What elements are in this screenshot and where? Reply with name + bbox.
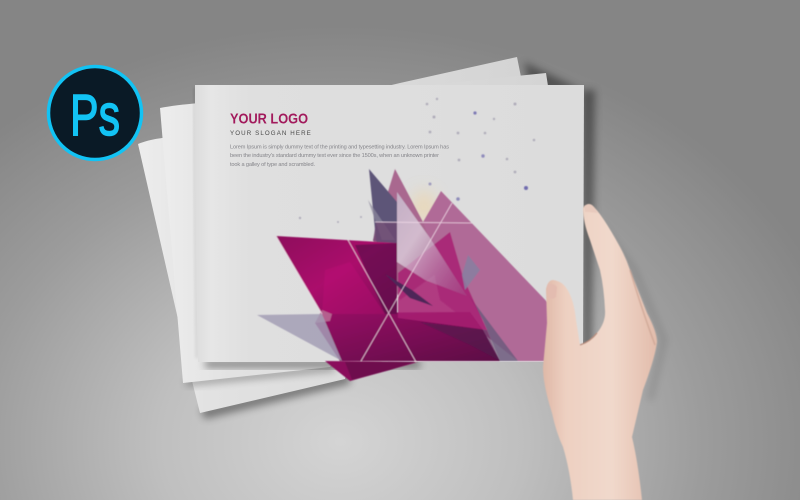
grey-purple band [467, 293, 518, 361]
main page [195, 85, 584, 362]
knuckle shade [630, 270, 655, 345]
index nail [584, 204, 598, 213]
lower magenta plane [315, 312, 500, 361]
big magenta quad [276, 236, 397, 314]
pink centre plane [398, 232, 487, 330]
shadow on back sheet [186, 364, 335, 386]
abstract crystal artwork [257, 169, 552, 381]
body text: took a galley of type and scrambled. [230, 162, 315, 168]
middle sheet [160, 73, 548, 383]
body text [230, 144, 449, 168]
translucent grey triangle [257, 314, 342, 361]
dark shards [385, 274, 433, 306]
logo heading: YOUR LOGO [230, 110, 308, 128]
body text: Lorem Ipsum is simply dummy text of the printing and typesetting industry. Lorem Ipsum has [230, 144, 449, 150]
shadow on middle sheet [205, 360, 420, 368]
large mauve triangle [423, 191, 552, 361]
thin white lines [276, 203, 472, 362]
back sheet [138, 57, 522, 413]
body text: been the industry's standard dummy text ever since the 1500s, when an unknown printer [230, 153, 439, 159]
hand [543, 204, 664, 500]
light translucent shard [397, 192, 467, 296]
Ps lettering: Ps [70, 83, 120, 148]
tall mauve triangle [373, 169, 441, 300]
mauve lower-left highlight [315, 310, 332, 323]
fragments below page edge [325, 361, 418, 381]
slate triangle [369, 169, 397, 300]
hand shape [543, 204, 657, 500]
hand shadow [600, 225, 664, 400]
thumb nail [547, 284, 557, 299]
scattered dots [299, 98, 535, 223]
Photoshop badge [48, 66, 142, 160]
warm glow [412, 191, 436, 223]
slogan: YOUR SLOGAN HERE [230, 130, 312, 137]
shadows under sheets [200, 62, 595, 419]
